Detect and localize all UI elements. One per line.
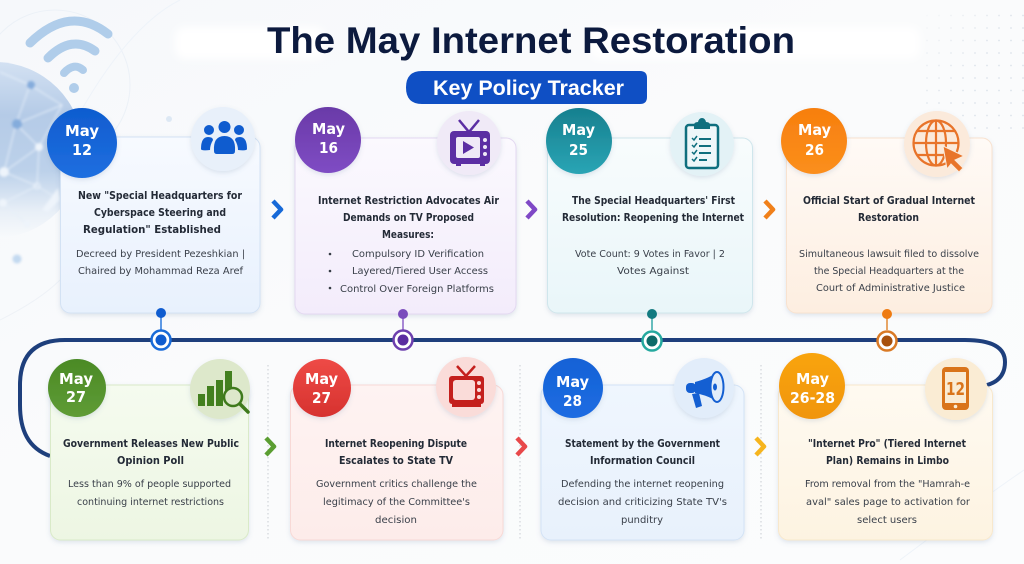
icon: clipboard checklist [670, 112, 734, 176]
date badge: 16 [319, 139, 338, 157]
date badge: May [556, 373, 589, 391]
body text [575, 249, 725, 277]
subtitle pill: Key Policy Tracker [433, 77, 624, 100]
bullet list [329, 249, 494, 295]
heading: Statement by the Government [565, 438, 720, 450]
heading [562, 195, 744, 224]
body text [558, 479, 727, 526]
body text: From removal from the "Hamrah-e [805, 479, 970, 490]
timeline connector line [20, 340, 1005, 456]
heading: Opinion Poll [117, 455, 184, 467]
icon: wifi [30, 21, 108, 93]
heading [808, 438, 966, 467]
heading: Information Council [590, 455, 695, 467]
timeline node: May 25 [642, 309, 662, 350]
heading [63, 438, 239, 467]
body text [805, 479, 971, 526]
date badge [543, 358, 603, 418]
panel: May 27 dispute [290, 357, 503, 540]
heading [318, 195, 500, 241]
bullet list: Control Over Foreign Platforms [340, 284, 494, 295]
panel: May 26 [781, 108, 992, 313]
heading: "Internet Pro" (Tiered Internet [808, 438, 966, 450]
date badge: 26-28 [790, 389, 835, 407]
bullet list: Layered/Tiered User Access [352, 266, 488, 277]
body text [76, 249, 245, 277]
heading: Government Releases New Public [63, 438, 239, 450]
body text: punditry [621, 515, 663, 526]
arrow [765, 201, 773, 218]
arrow [756, 438, 764, 455]
panel: May 26-28 [778, 353, 992, 540]
icon: phone with calendar number [925, 358, 987, 420]
heading: Demands on TV Proposed [343, 212, 474, 224]
heading: Plan) Remains in Limbo [826, 455, 949, 467]
body text: Less than 9% of people supported [68, 479, 231, 490]
date badge [293, 359, 351, 417]
date badge: 27 [312, 389, 331, 407]
panel: May 12 [47, 107, 260, 313]
heading [325, 438, 467, 467]
heading: Internet Reopening Dispute [325, 438, 467, 450]
date badge [48, 359, 106, 417]
heading: Escalates to State TV [339, 455, 453, 467]
globe illustration [0, 62, 83, 264]
body text: legitimacy of the Committee's [323, 497, 470, 508]
date badge: May [562, 121, 595, 139]
heading [803, 195, 975, 224]
date badge [295, 107, 361, 173]
icon: people [191, 107, 255, 171]
arrow [527, 201, 535, 218]
body text: aval" sales page to activation for [806, 497, 971, 508]
date badge: 12 [72, 141, 92, 159]
date badge: May [312, 120, 345, 138]
panel: May 25 [546, 108, 752, 313]
date badge: 26 [805, 141, 824, 159]
timeline node: May 16 [394, 309, 412, 350]
date badge [47, 108, 117, 178]
panel: May 27 poll [48, 359, 250, 540]
timeline node: May 12 [152, 308, 170, 350]
body text: Simultaneous lawsuit filed to dissolve [799, 249, 979, 260]
heading: Measures: [382, 229, 434, 241]
date badge: May [796, 370, 829, 388]
arrow [266, 438, 274, 455]
date badge: 28 [563, 392, 582, 410]
heading: Official Start of Gradual Internet [803, 195, 975, 207]
body text: Defending the internet reopening [561, 479, 724, 490]
body text: Court of Administrative Justice [816, 283, 965, 294]
date badge: May [798, 121, 831, 139]
heading: Resolution: Reopening the Internet [562, 212, 744, 224]
panel: May 16 [295, 107, 516, 314]
icon: globe with cursor [904, 111, 970, 177]
date badge: May [65, 122, 99, 140]
subtitle pill [406, 71, 647, 104]
date badge [781, 108, 847, 174]
body text [316, 479, 477, 526]
timeline node: May 26 [878, 309, 896, 350]
icon: phone with calendar number: 12 [946, 379, 965, 400]
heading: Regulation" Established [83, 224, 221, 236]
body text: Chaired by Mohammad Reza Aref [78, 266, 243, 277]
bullet list: Compulsory ID Verification [352, 249, 484, 260]
body text: Vote Count: 9 Votes in Favor | 2 [575, 249, 725, 260]
dotted separators [268, 365, 761, 540]
icon: bar chart with magnifier [190, 359, 250, 419]
icon: TV with play button [437, 111, 501, 175]
heading: Internet Restriction Advocates Air [318, 195, 500, 207]
date badge: May [59, 370, 93, 388]
icon: red TV [436, 357, 496, 417]
body text: select users [857, 515, 917, 526]
icon: megaphone [674, 358, 734, 418]
date badge [546, 108, 612, 174]
arrow [273, 201, 281, 218]
title: The May Internet Restoration [267, 20, 795, 61]
panel: May 28 [541, 358, 744, 540]
date badge: 27 [66, 388, 86, 406]
body text: decision and criticizing State TV's [558, 497, 727, 508]
body text: the Special Headquarters at the [814, 266, 964, 277]
body text: Votes Against [617, 266, 689, 277]
heading: New "Special Headquarters for [78, 190, 243, 202]
date badge: 25 [569, 141, 588, 159]
heading: The Special Headquarters' First [572, 195, 735, 207]
arrow [517, 438, 525, 455]
date badge [779, 353, 845, 419]
body text [799, 249, 979, 294]
heading [78, 190, 243, 236]
white blobs behind title [175, 27, 920, 59]
heading: Cyberspace Steering and [94, 207, 226, 219]
body text: Government critics challenge the [316, 479, 477, 490]
heading [565, 438, 720, 467]
body text [68, 479, 231, 508]
body text: Decreed by President Pezeshkian | [76, 249, 245, 260]
date badge: May [305, 370, 338, 388]
body text: decision [375, 515, 417, 526]
heading: Restoration [858, 212, 919, 224]
body text: continuing internet restrictions [77, 497, 224, 508]
